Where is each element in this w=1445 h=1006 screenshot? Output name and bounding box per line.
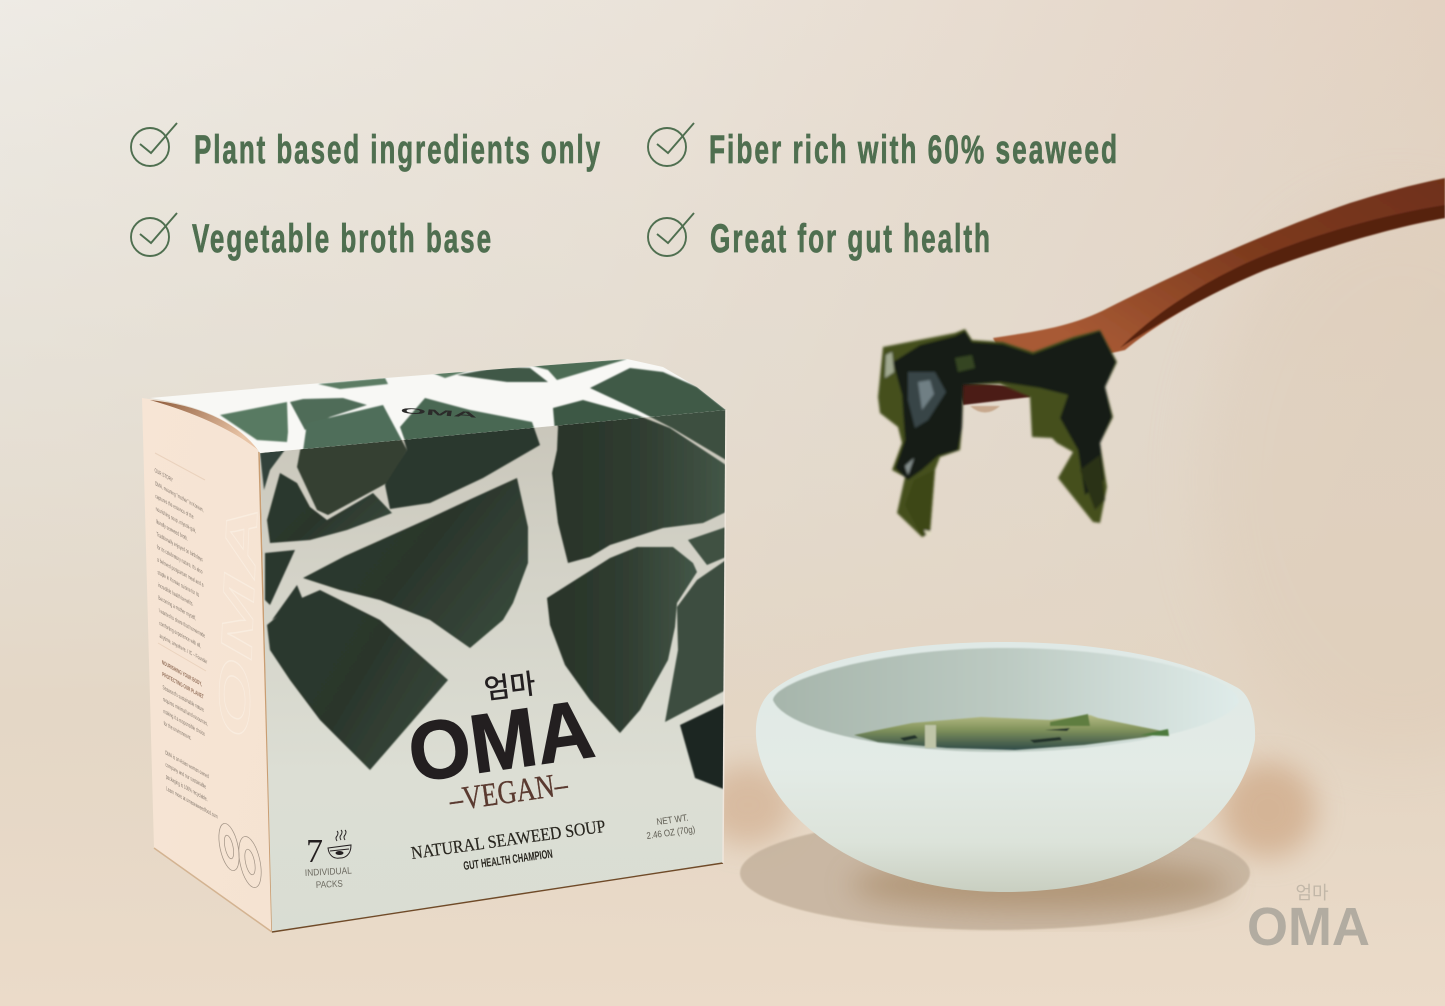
box side panel xyxy=(142,398,272,932)
seaweed silhouette xyxy=(878,329,1117,537)
side story text: literally seaweed broth. xyxy=(156,518,188,543)
vegan label: –VEGAN– xyxy=(446,767,570,819)
product name: NATURAL SEAWEED SOUP xyxy=(410,816,607,863)
side story text: Learn more at omaseaweedfood.com xyxy=(166,785,218,821)
seaweed pattern on front xyxy=(260,410,726,790)
bowl interior xyxy=(773,648,1239,752)
embossed side logo: OMA xyxy=(209,488,267,750)
side story text: I wanted to share that homemade xyxy=(159,607,205,640)
feature: gut health: Great for gut health xyxy=(710,217,992,261)
icon: steaming bowl xyxy=(328,830,351,858)
table shadows xyxy=(703,762,1316,930)
glossy highlights xyxy=(908,372,946,428)
box front panel xyxy=(260,368,726,932)
soup xyxy=(854,714,1169,750)
flap logotype: OMA xyxy=(400,407,479,420)
side story text: making it a responsible choice xyxy=(163,708,205,739)
wooden spoon xyxy=(957,178,1445,412)
pack count: 7 xyxy=(306,833,323,870)
side story text: comforting experience with all, xyxy=(159,620,201,650)
side story text xyxy=(154,467,218,821)
seaweed pattern on flap xyxy=(220,359,726,458)
feature: fiber rich xyxy=(648,123,1119,172)
bowl body xyxy=(756,642,1255,892)
feature list xyxy=(131,123,1119,261)
OMA logotype: OMA xyxy=(403,682,600,800)
side story text: packaging is 100% recyclable. xyxy=(166,773,208,804)
feature: gut health xyxy=(648,213,992,261)
side story text: Traditionally enjoyed on birthdays xyxy=(156,531,203,564)
side story text: a beloved postpartum meal and a xyxy=(157,556,204,589)
side story text: NOURISHING YOUR BODY, xyxy=(162,659,202,689)
product box xyxy=(142,359,726,932)
certification seals xyxy=(215,822,265,890)
side story text: staple in Korean cuisine for its xyxy=(158,569,200,600)
side story text: OMA is an Asian woman owned xyxy=(165,749,209,781)
side story text: captures the essence of the xyxy=(155,493,194,522)
box front text: PACKS xyxy=(316,879,343,891)
seaweed on spoon xyxy=(878,329,1117,537)
spoon bowl underside xyxy=(957,382,1037,405)
box front text: 2.46 OZ (70g) xyxy=(646,824,696,842)
side story text: nourishing soup, miyeok-guk, xyxy=(156,506,196,535)
side story text: Becoming a mother myself, xyxy=(158,594,196,623)
side story text: company and our sustainable xyxy=(165,761,206,791)
side story text: for its celebratory nature, it's also xyxy=(157,544,203,576)
side story text: PROTECTING OUR PLANET xyxy=(162,671,204,701)
feature: plant based ingredients: Plant based ingredients only xyxy=(194,128,602,172)
watermark logo: OMA xyxy=(1247,897,1370,957)
soup bowl xyxy=(756,642,1255,892)
box front text xyxy=(305,668,696,891)
net weight: NET WT. xyxy=(656,813,689,828)
feature: plant based ingredients xyxy=(131,123,602,172)
side story text: Seaweed's sustainable nature xyxy=(163,684,204,714)
side story text: requires minimal land resources, xyxy=(163,696,208,728)
feature: vegetable broth: Vegetable broth base xyxy=(192,217,493,261)
box top flap xyxy=(150,359,726,458)
side story text: OMA, meaning "mother" in Korean, xyxy=(155,480,204,514)
side story text: OUR STORY xyxy=(154,467,174,485)
watermark logo: 엄마 xyxy=(1295,883,1329,903)
tagline: GUT HEALTH CHAMPION xyxy=(462,847,554,873)
side story text: for the environment. xyxy=(164,720,191,743)
dark seaweed folds xyxy=(893,331,1116,495)
korean logotype: 엄마 xyxy=(482,668,538,705)
pack label: INDIVIDUAL xyxy=(305,866,352,879)
feature: fiber rich: Fiber rich with 60% seaweed xyxy=(709,128,1119,172)
side story text: anytime, anywhere. / IC – Founder xyxy=(159,633,208,667)
feature: vegetable broth xyxy=(131,213,493,261)
side story text: incredible health benefits. xyxy=(158,582,193,609)
